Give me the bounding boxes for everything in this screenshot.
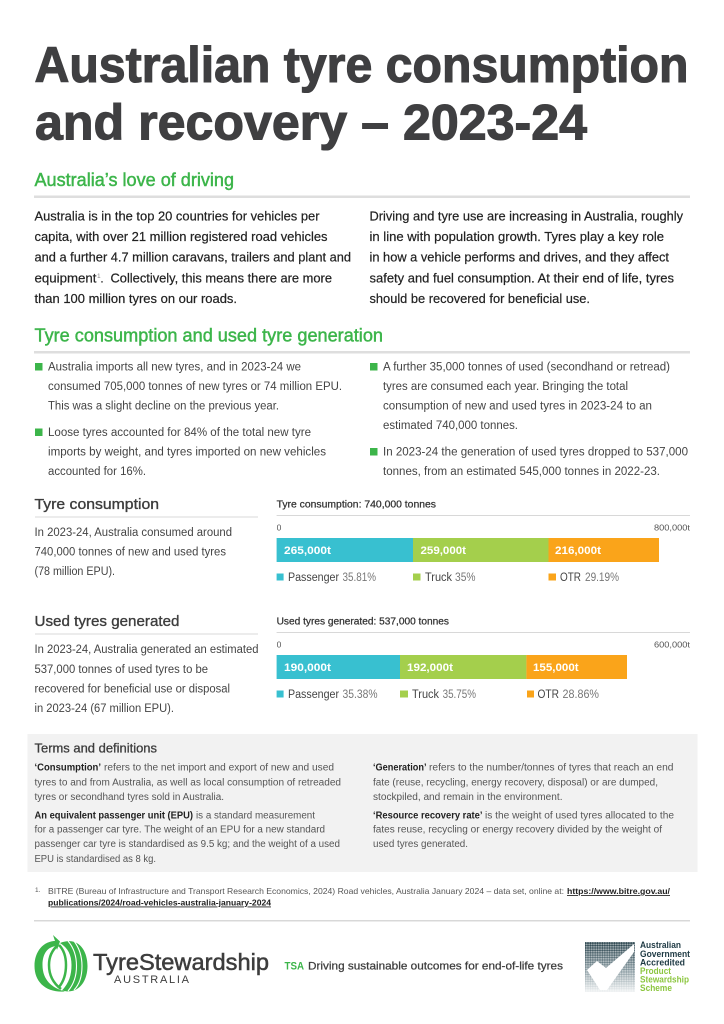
- definition: resource recovery rate: is the weight of used tyres allocated to the: [485, 810, 674, 822]
- logo: Tyre Stewardship Australia: AUSTRALIA: [114, 974, 190, 986]
- text block: driving and tyre use: in how a vehicle performs and drives, and they affect: [370, 250, 670, 264]
- chart: tyre consumption: Passenger: [288, 572, 339, 584]
- text block: driving and tyre use: Driving and tyre use are increasing in Australia, roughly: [370, 210, 684, 224]
- panel: tyre consumption summary: [34, 496, 258, 578]
- panel: terms and definitions: Terms and definitions: [34, 740, 157, 756]
- definition: generation: [373, 762, 674, 803]
- bullet: generation: [370, 446, 688, 478]
- chart: tyre consumption: 35.81%: [342, 572, 376, 584]
- chart: used tyres generated: 35.75%: [443, 689, 476, 701]
- bullet: loose tyres: imports by weight, and tyres imported on new vehicles: [48, 446, 326, 458]
- definition: resource recovery rate: [373, 810, 674, 850]
- panel: tyre consumption summary: In 2023-24, Australia consumed around: [34, 527, 232, 539]
- panel: tyre consumption summary: (78 million EPU).: [34, 566, 115, 578]
- definition: resource recovery rate: ‘Resource recovery rate’: [373, 810, 483, 822]
- chart: tyre consumption: OTR: [560, 572, 581, 584]
- chart: tyre consumption: 0: [277, 522, 282, 532]
- tagline: Driving sustainable outcomes for end-of-life tyres: [308, 960, 564, 972]
- chart: used tyres generated: 600,000t: [654, 640, 691, 650]
- chart: used tyres generated: 190,000t: [284, 662, 331, 674]
- bullet: used tyres consumed: tyres are consumed each year. Bringing the total: [383, 381, 628, 393]
- footnote: BITRE (Bureau of Infrastructure and Transport Research Economics, 2024) Road vehicles, Australia January 2024 – data set, online at:: [48, 886, 564, 896]
- chart: tyre consumption: 800,000t: [654, 522, 691, 532]
- footnote: [35, 886, 671, 908]
- definition: consumption: tyres to and from Australia, as well as local consumption of retreaded: [34, 778, 341, 788]
- definition: consumption: [34, 762, 341, 803]
- footnote: 1.: [35, 887, 41, 894]
- text block: vehicles per capita: Collectively, this means there are more: [110, 272, 332, 286]
- chart: tyre consumption: Tyre consumption: 740,000 tonnes: [277, 500, 436, 510]
- bullet: used tyres consumed: A further 35,000 tonnes of used (secondhand or retread): [383, 362, 670, 374]
- definition: resource recovery rate: used tyres generated.: [373, 839, 468, 850]
- definition: EPU: passenger car tyre is standardised as 9.5 kg; and the weight of a used: [34, 839, 340, 850]
- bullet: used tyres consumed: consumption of new and used tyres in 2023-24 to an: [383, 400, 652, 412]
- chart: used tyres generated: 192,000t: [407, 662, 453, 674]
- text block: driving and tyre use: in line with population growth. Tyres play a key role: [370, 230, 664, 244]
- text block: driving and tyre use: [370, 210, 684, 306]
- logo: Product Stewardship Scheme: Stewardship: [640, 974, 689, 984]
- text block: vehicles per capita: 1: [97, 273, 101, 280]
- chart: used tyres generated: Passenger: [288, 689, 339, 701]
- definition: generation: refers to the number/tonnes of tyres that reach an end: [429, 762, 674, 774]
- chart: used tyres generated: 28.86%: [562, 689, 599, 701]
- chart: tyre consumption: 29.19%: [585, 572, 619, 584]
- panel: used tyres generated summary: Used tyres generated: [34, 613, 180, 630]
- chart: used tyres generated: [277, 616, 691, 701]
- definition: consumption: tyres or secondhand tyres sold in Australia.: [34, 792, 224, 803]
- bullet: loose tyres: [35, 427, 326, 478]
- logo: Tyre Stewardship Australia: TyreStewardship: [93, 949, 269, 975]
- icon: halftone tick: [585, 942, 635, 992]
- text block: vehicles per capita: capita, with over 21 million registered road vehicles: [34, 230, 328, 244]
- panel: used tyres generated summary: recovered for beneficial use or disposal: [34, 684, 230, 696]
- title: and recovery – 2023-24: [35, 94, 587, 150]
- text block: vehicles per capita: and a further 4.7 million caravans, trailers and plant and: [34, 250, 351, 264]
- text block: vehicles per capita: [34, 210, 351, 306]
- text block: driving and tyre use: safety and fuel consumption. At their end of life, tyres: [370, 272, 674, 286]
- footnote: https://www.bitre.gov.au/: [567, 886, 671, 896]
- definition: EPU: [34, 810, 340, 865]
- bullet: used tyres consumed: [370, 362, 670, 432]
- text block: vehicles per capita: equipment: [34, 272, 97, 286]
- chart: tyre consumption: [277, 500, 691, 584]
- chart: used tyres generated: Used tyres generated: 537,000 tonnes: [277, 616, 449, 628]
- panel: tyre consumption summary: 740,000 tonnes of new and used tyres: [34, 546, 226, 558]
- panel: used tyres generated summary: in 2023-24 (67 million EPU).: [34, 703, 174, 715]
- bullet: used tyres consumed: estimated 740,000 tonnes.: [383, 420, 518, 432]
- text block: vehicles per capita: .: [100, 272, 104, 286]
- definition: generation: stockpiled, and remain in the environment.: [373, 792, 562, 803]
- logo: Product Stewardship Scheme: Scheme: [640, 983, 672, 993]
- logo: Product Stewardship Scheme: Australian: [640, 940, 681, 950]
- panel: used tyres generated summary: 537,000 tonnes of used tyres to be: [34, 664, 208, 676]
- bullet: imports: Australia imports all new tyres, and in 2023-24 we: [48, 362, 301, 374]
- definition: generation: ‘Generation’: [373, 762, 427, 774]
- bullet: generation: In 2023-24 the generation of used tyres dropped to 537,000: [383, 446, 688, 458]
- panel: terms and definitions: [28, 734, 698, 872]
- chart: tyre consumption: Truck: [425, 572, 452, 584]
- chart: used tyres generated: 155,000t: [533, 662, 579, 674]
- footnote: publications/2024/road-vehicles-australia-january-2024: [48, 898, 271, 908]
- icon: tyre with recycling arrow: [34, 935, 88, 992]
- bullet: imports: This was a slight decline on the previous year.: [48, 400, 279, 412]
- definition: consumption: ‘Consumption’: [34, 762, 101, 774]
- chart: used tyres generated: 35.38%: [342, 689, 378, 701]
- bullet: imports: consumed 705,000 tonnes of new tyres or 74 million EPU.: [48, 381, 342, 393]
- bullet: loose tyres: accounted for 16%.: [48, 466, 146, 478]
- logo: Product Stewardship Scheme: Product: [640, 966, 671, 976]
- definition: consumption: refers to the net import and export of new and used: [104, 762, 334, 774]
- chart: used tyres generated: OTR: [538, 689, 559, 701]
- definition: resource recovery rate: fates reuse, recycling or energy recovery divided by the weight of: [373, 824, 662, 836]
- panel: used tyres generated summary: In 2023-24, Australia generated an estimated: [34, 644, 258, 656]
- text block: vehicles per capita: than 100 million tyres on our roads.: [34, 292, 237, 306]
- chart: used tyres generated: Truck: [412, 689, 439, 701]
- logo: Product Stewardship Scheme: Government: [640, 949, 690, 959]
- panel: used tyres generated summary: [34, 613, 258, 715]
- text block: vehicles per capita: Australia is in the top 20 countries for vehicles per: [34, 210, 320, 224]
- logo: Product Stewardship Scheme: [585, 940, 690, 993]
- chart: tyre consumption: 259,000t: [420, 545, 466, 557]
- heading: Australia's love of driving: Australia’s love of driving: [34, 170, 234, 190]
- definition: generation: fate (reuse, recycling, energy recovery, disposal) or are dumped,: [373, 778, 658, 788]
- chart: tyre consumption: 265,000t: [284, 545, 331, 557]
- title: Australian tyre consumption: [34, 37, 688, 93]
- heading: Tyre consumption and used tyre generation: Tyre consumption and used tyre generation: [34, 326, 383, 346]
- definition: EPU: is a standard measurement: [196, 810, 315, 822]
- logo: Tyre Stewardship Australia: [34, 935, 269, 992]
- bullet: loose tyres: Loose tyres accounted for 84% of the total new tyre: [48, 427, 311, 439]
- chart: tyre consumption: 35%: [455, 572, 476, 584]
- definition: EPU: for a passenger car tyre. The weight of an EPU for a new standard: [34, 824, 325, 836]
- tagline: TSA: [284, 960, 304, 972]
- definition: EPU: EPU is standardised as 8 kg.: [34, 854, 156, 865]
- logo: Product Stewardship Scheme: Accredited: [640, 958, 685, 968]
- panel: tyre consumption summary: Tyre consumption: [34, 496, 159, 513]
- chart: tyre consumption: 216,000t: [555, 545, 601, 557]
- title: [34, 37, 688, 150]
- definition: EPU: An equivalent passenger unit (EPU): [34, 810, 193, 822]
- bullet: imports: [35, 362, 342, 412]
- chart: used tyres generated: 0: [277, 640, 282, 650]
- text block: driving and tyre use: should be recovered for beneficial use.: [370, 292, 590, 306]
- bullet: generation: tonnes, from an estimated 545,000 tonnes in 2022-23.: [383, 466, 660, 478]
